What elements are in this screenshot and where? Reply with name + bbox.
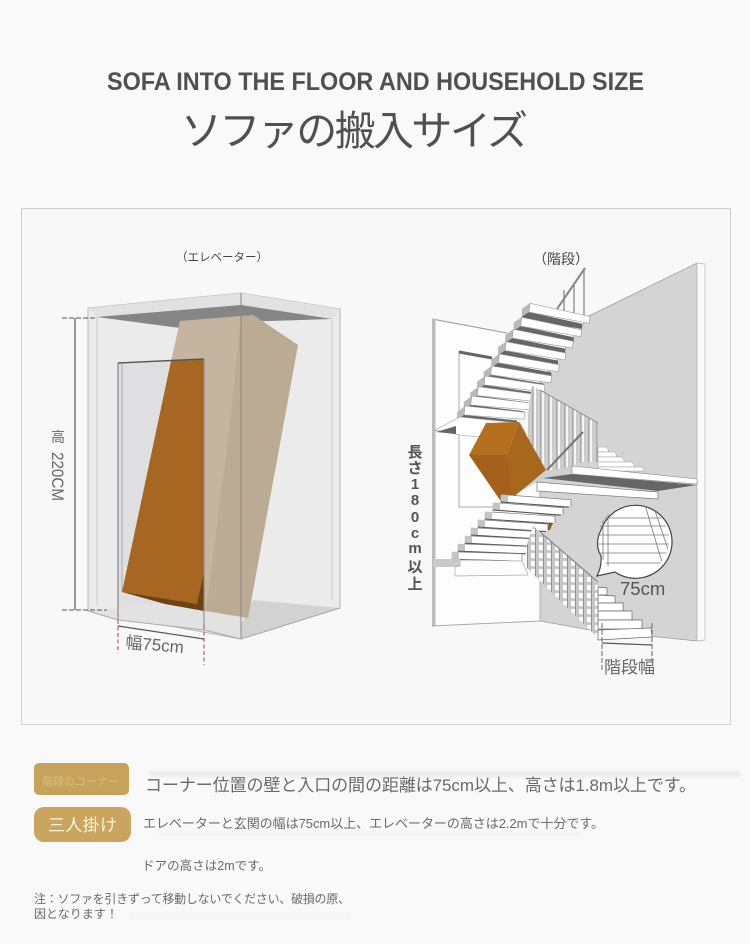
width dimension: 幅75cm <box>125 633 185 657</box>
vertical label: length: m <box>408 540 422 557</box>
text: note: 因となります！ <box>34 907 118 921</box>
badge: three-seater: 三人掛け <box>48 816 117 835</box>
badge: stair corner: 階段のコーナー <box>42 774 119 788</box>
height dimension: 高 <box>51 429 65 445</box>
top railing <box>557 268 585 315</box>
stair width dimension <box>602 623 655 677</box>
height dimension <box>48 318 107 610</box>
heading: elevator: （エレベーター） <box>176 251 268 264</box>
vertical label: length: 上 <box>407 576 423 593</box>
height dimension: 220CM <box>48 452 67 501</box>
right wall <box>540 263 705 641</box>
lower balustrade <box>527 526 598 638</box>
upper balustrade <box>525 386 598 470</box>
text: corner requirement: コーナー位置の壁と入口の間の距離は75cm以上、高さは1.8m以上です。 <box>145 776 696 795</box>
text: elevator requirement: エレベーターと玄関の幅は75cm以上、エレベーターの高さは2.2mで十分です。 <box>143 816 604 831</box>
upper flight of stairs <box>457 302 590 431</box>
bottom flight of stairs <box>598 587 652 640</box>
upper right small steps <box>598 447 645 471</box>
vertical label: length: 以 <box>407 559 423 576</box>
panel: diagrams <box>22 208 730 724</box>
vertical label: length: c <box>411 525 419 542</box>
vertical label: length: 長 <box>407 444 423 461</box>
heading: stairs: （階段） <box>533 251 589 267</box>
badge: three-seater <box>34 807 131 842</box>
vertical label: length: さ <box>407 460 423 477</box>
callout: stair width detail <box>596 504 673 595</box>
title: japanese: ソファの搬入サイズ <box>181 108 528 154</box>
vertical label: length: 0 <box>411 509 419 526</box>
text: note: 注：ソファを引きずって移動しないでください、破損の原、 <box>34 891 350 906</box>
panel: elevator diagram <box>48 251 340 665</box>
lower flight of stairs <box>452 494 571 561</box>
sofa ghost (beige) <box>171 315 298 618</box>
upper landing <box>435 417 530 442</box>
left wall <box>432 319 540 626</box>
text: door requirement: ドアの高さは2mです。 <box>142 858 271 873</box>
bottom landing <box>433 559 528 576</box>
text: note <box>34 891 350 921</box>
door frame <box>88 293 340 639</box>
width dimension <box>118 620 204 665</box>
vertical label: length: 1 <box>411 476 419 493</box>
vertical label: length <box>407 444 423 593</box>
sofa carried on stairs <box>469 422 554 530</box>
faded artefact bands <box>130 771 740 917</box>
vertical label: length: 8 <box>411 492 419 509</box>
mid landing <box>522 466 697 499</box>
stair width dimension: 階段幅 <box>604 658 655 677</box>
panel: staircase diagram <box>407 251 705 677</box>
title: english: SOFA INTO THE FLOOR AND HOUSEHOLD SIZE <box>107 68 644 96</box>
callout: stair width detail: 75cm <box>620 578 665 599</box>
elevator box <box>88 293 340 639</box>
sofa (orange) <box>122 359 204 611</box>
badge: stair corner <box>34 763 129 795</box>
